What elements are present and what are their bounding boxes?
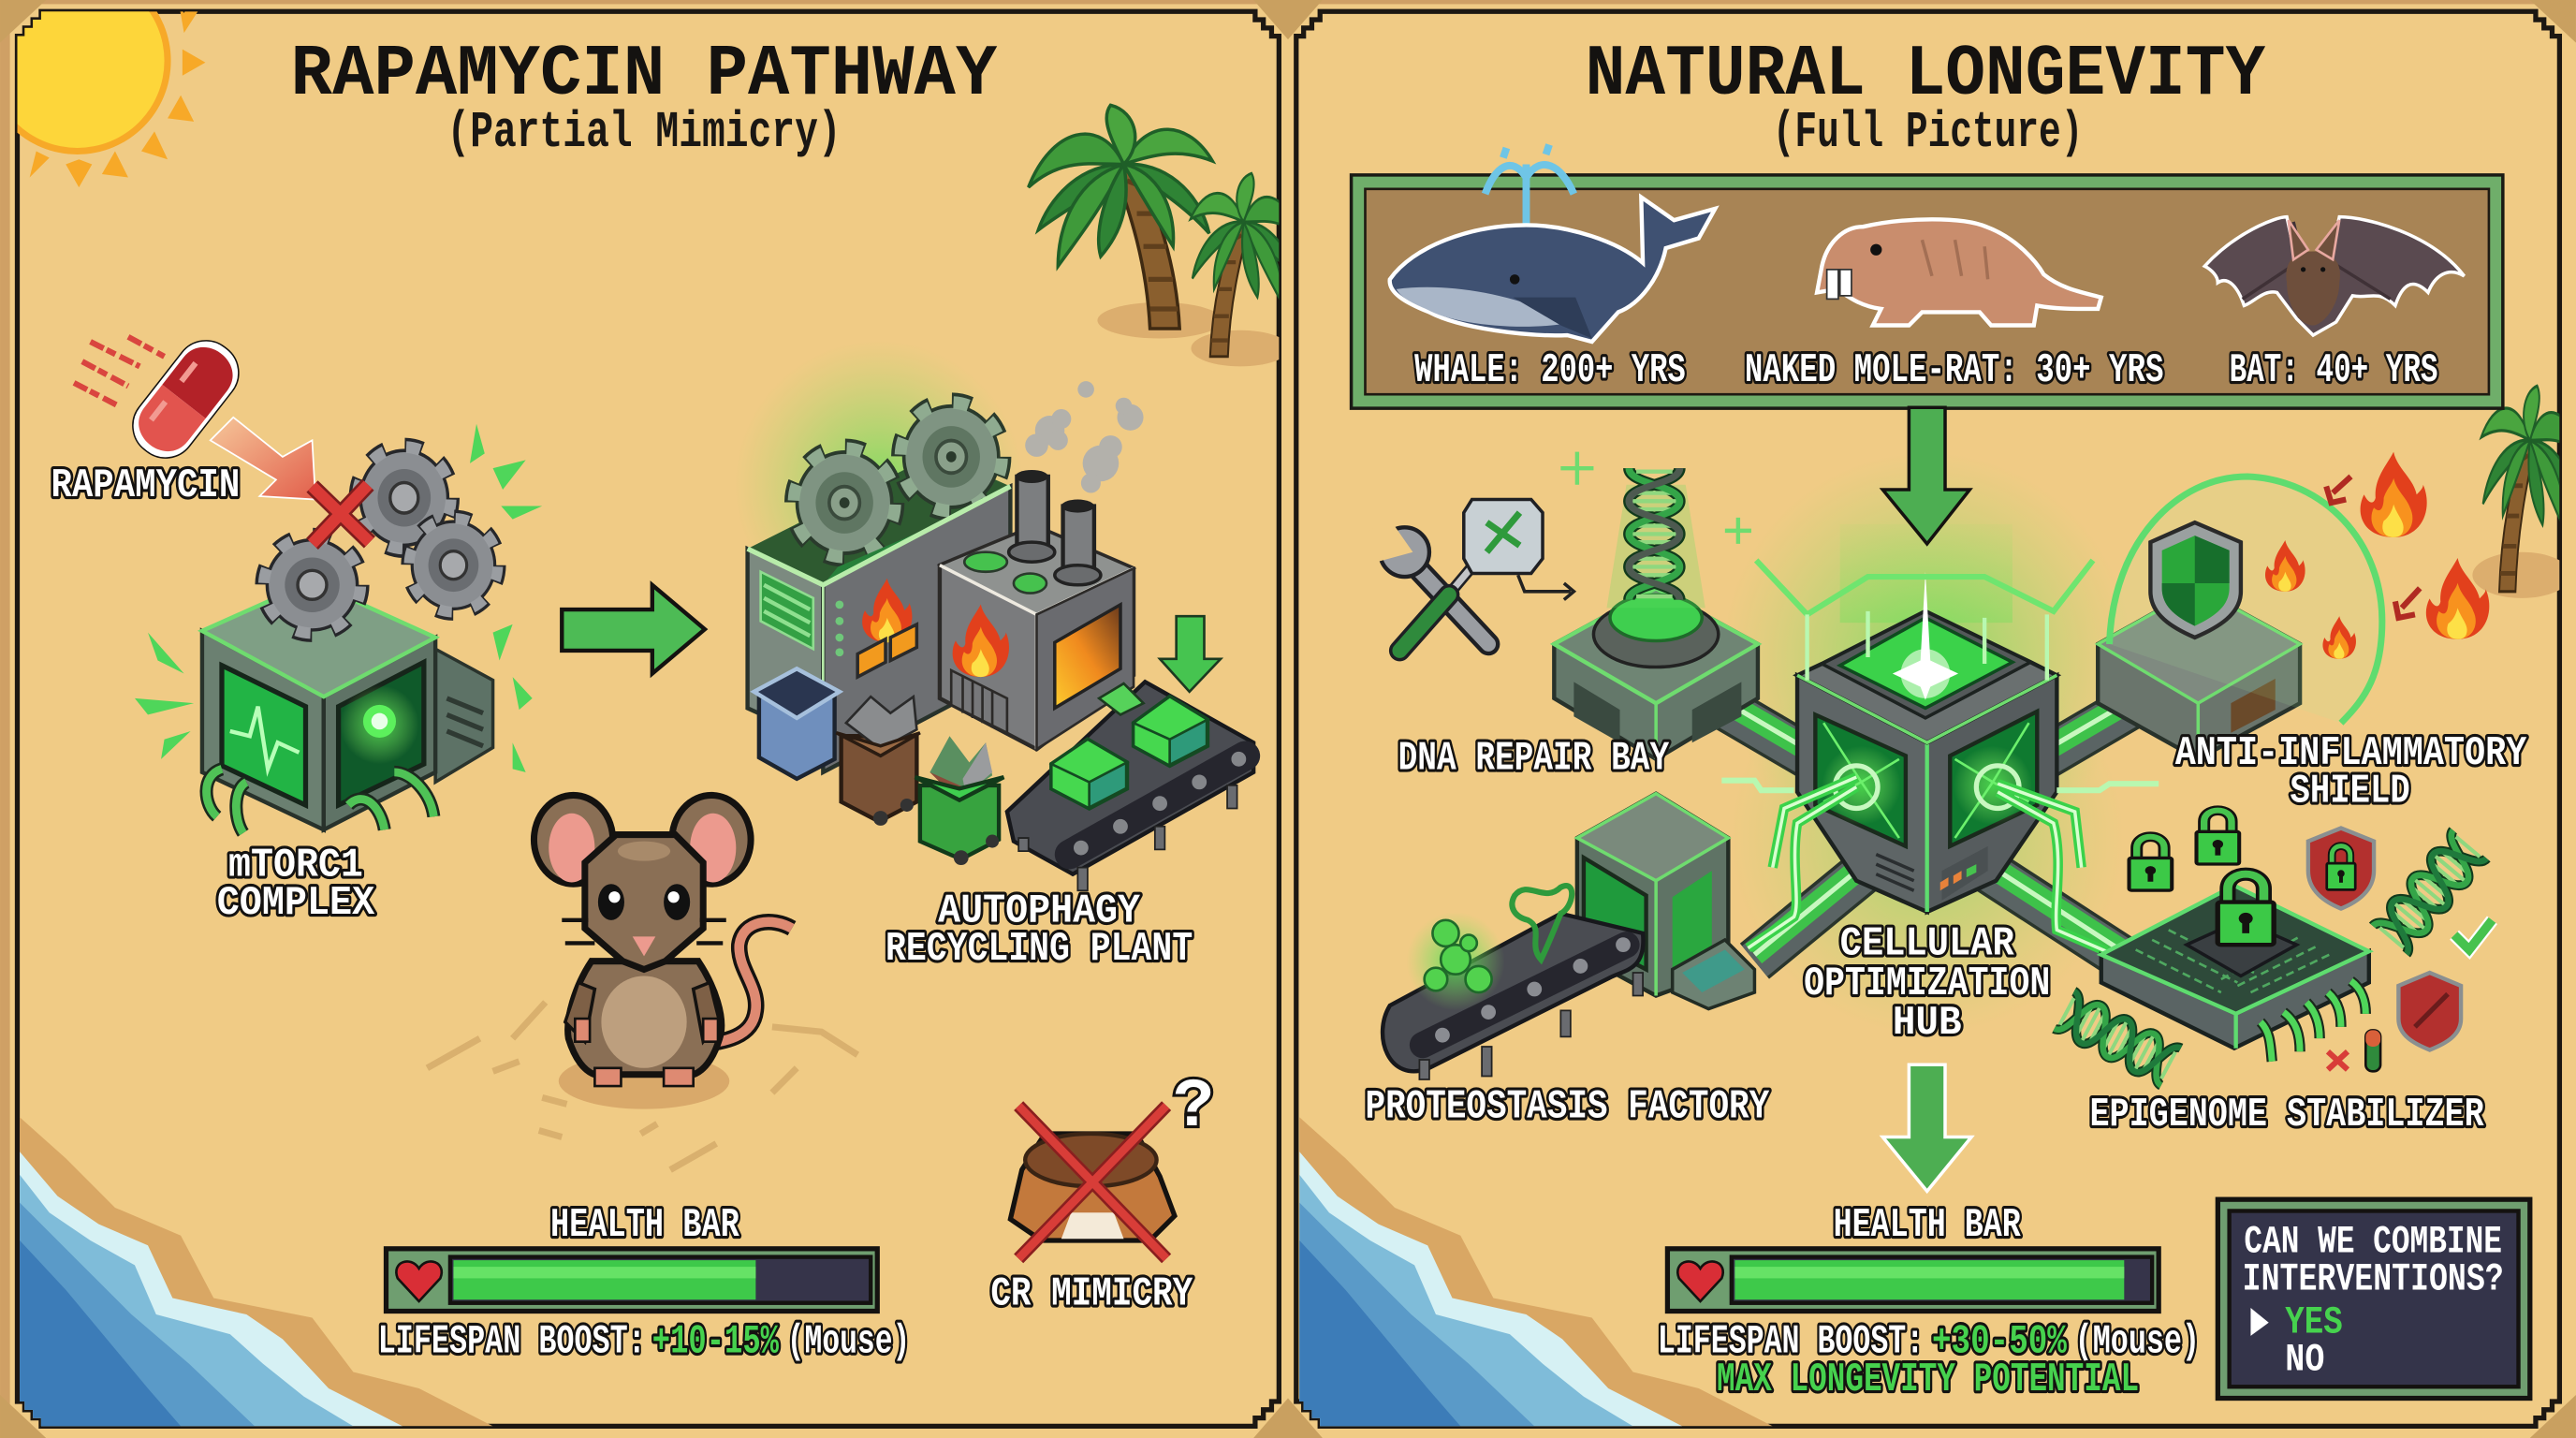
- label: lifespan boost right: (Mouse): [2075, 1318, 2200, 1365]
- arrow: from animals to hub: [1882, 407, 1969, 544]
- dialog: combine interventions: INTERVENTIONS?: [2243, 1257, 2504, 1302]
- label: epigenome stabilizer: EPIGENOME STABILIZER: [2089, 1092, 2484, 1138]
- arrow: inhibition: [211, 418, 315, 500]
- icon: cellular optimization hub: [1721, 560, 2159, 951]
- icon: red x block top: [313, 485, 370, 544]
- label: optimization: OPTIMIZATION: [1804, 961, 2050, 1007]
- label: rapamycin: RAPAMYCIN: [51, 462, 240, 509]
- panel: natural longevity: [1296, 11, 2576, 1426]
- icon: palm tree right: [2473, 384, 2559, 598]
- icon: proteostasis factory: [1383, 794, 1754, 1079]
- dialog: combine interventions: [2217, 1199, 2530, 1399]
- hub glow: [1721, 452, 2132, 1035]
- panel: long-lived animals: [1352, 144, 2502, 407]
- conveyor: [1007, 682, 1253, 874]
- recycling bins: [759, 697, 835, 779]
- dialog: combine interventions: NO: [2285, 1338, 2324, 1383]
- dialog: combine interventions: YES: [2285, 1299, 2343, 1344]
- label: lifespan boost: +10-15%: [652, 1318, 779, 1365]
- icon: question mark: ?: [1173, 1069, 1214, 1147]
- arrow: to health bar: [1882, 1064, 1971, 1191]
- label: shield: SHIELD: [2291, 768, 2410, 814]
- shoreline right: [1299, 1117, 1773, 1426]
- panel: rapamycin pathway: [0, 0, 1301, 1426]
- label: naked mole-rat: NAKED MOLE-RAT: 30+ YRS: [1745, 347, 2163, 394]
- icon: heart right: [1677, 1261, 1723, 1301]
- icon: heart: [396, 1261, 442, 1301]
- icon: sun: [17, 11, 206, 187]
- label: dna repair bay: DNA REPAIR BAY: [1398, 735, 1670, 782]
- connector pipes: [1708, 692, 2145, 961]
- label: recycling plant: RECYCLING PLANT: [886, 926, 1193, 973]
- label: hub: HUB: [1893, 1000, 1962, 1047]
- label: complex: COMPLEX: [217, 880, 375, 927]
- icon: mtorc1 machine: [135, 424, 542, 833]
- label: proteostasis factory: PROTEOSTASIS FACTORY: [1365, 1083, 1770, 1130]
- label: health bar: HEALTH BAR: [550, 1202, 739, 1249]
- label: whale: WHALE: 200+ YRS: [1414, 347, 1686, 394]
- label: mtorc1: mTORC1: [228, 842, 363, 888]
- subtitle: full picture: (Full Picture): [1773, 105, 2083, 162]
- icon: anti-inflammatory shield station: [2098, 477, 2382, 759]
- arrow: pathway: [562, 585, 705, 674]
- health bar: [386, 1249, 877, 1312]
- icon: autophagy recycling plant: [735, 340, 1253, 890]
- furnace opening: [751, 470, 1007, 582]
- title: rapamycin pathway: RAPAMYCIN PATHWAY: [291, 35, 998, 116]
- label: max longevity potential: MAX LONGEVITY POTENTIAL: [1717, 1357, 2139, 1403]
- label: health bar right: HEALTH BAR: [1834, 1202, 2021, 1249]
- subtitle: partial mimicry: (Partial Mimicry): [446, 105, 842, 162]
- icon: crossed food bowl: [1010, 1106, 1175, 1258]
- shoreline: [20, 1117, 493, 1426]
- icons: flames: [2265, 452, 2489, 659]
- title: natural longevity: NATURAL LONGEVITY: [1586, 35, 2266, 116]
- label: bat: BAT: 40+ YRS: [2230, 347, 2438, 394]
- icon: mouse: [534, 795, 792, 1109]
- health bar right: [1667, 1249, 2159, 1312]
- sand marks: [427, 1003, 857, 1170]
- label: lifespan boost right: +30-50%: [1932, 1318, 2067, 1365]
- label: cr mimicry: CR MIMICRY: [990, 1270, 1193, 1317]
- label: lifespan boost right: [1658, 1318, 2200, 1365]
- label: autophagy: AUTOPHAGY: [938, 888, 1141, 935]
- label: lifespan boost: LIFESPAN BOOST:: [378, 1318, 646, 1365]
- icon: epigenome stabilizer: [2055, 811, 2492, 1085]
- label: lifespan boost right: LIFESPAN BOOST:: [1658, 1318, 1924, 1365]
- icon: bat: [2204, 217, 2465, 335]
- label: lifespan boost: [378, 1318, 910, 1365]
- icon: rapamycin pill: [73, 334, 240, 459]
- label: lifespan boost: (Mouse): [787, 1318, 910, 1365]
- icon: whale: [1390, 144, 1715, 342]
- icon: dna repair bay: [1554, 452, 1758, 759]
- label: cellular: CELLULAR: [1840, 921, 2014, 968]
- icon: naked mole-rat: [1817, 219, 2101, 325]
- dialog: combine interventions: CAN WE COMBINE: [2244, 1219, 2502, 1264]
- icon: red x block: [313, 485, 370, 544]
- icon: palm trees: [1029, 105, 1301, 366]
- icon: wrench and screwdriver: [1364, 500, 1573, 651]
